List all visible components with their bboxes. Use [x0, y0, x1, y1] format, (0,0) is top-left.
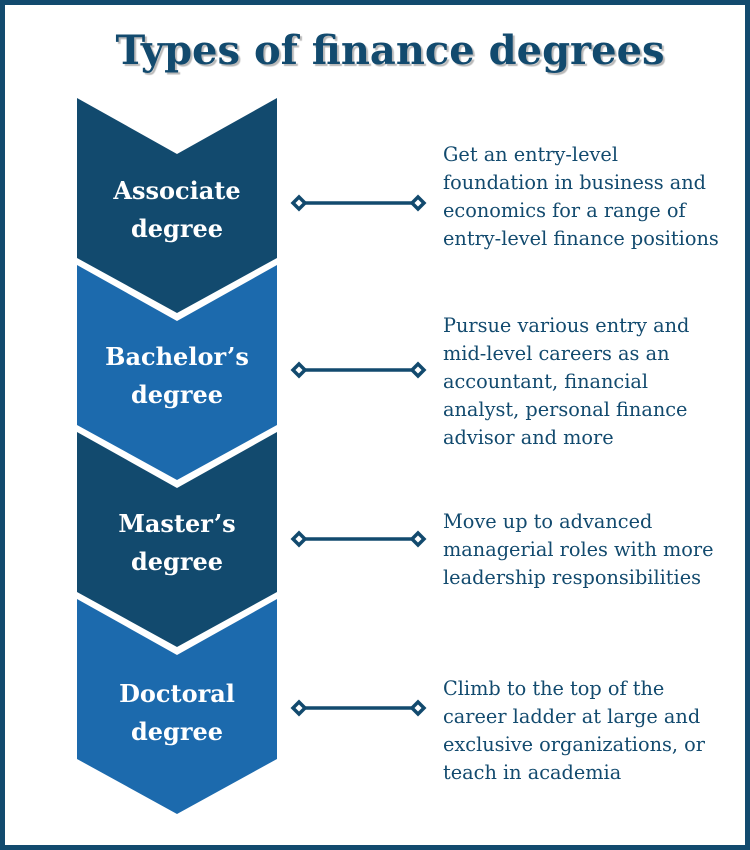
label: master: Master’s [118, 509, 236, 538]
description: master: managerial roles with more [443, 538, 714, 561]
description: master: leadership responsibilities [443, 566, 701, 589]
description: doctoral: exclusive organizations, or [443, 733, 705, 756]
label: bachelor: Bachelor’s [105, 342, 249, 371]
label: master: degree [131, 547, 223, 576]
connector 2 [293, 364, 424, 376]
description: associate: Get an entry-level [443, 143, 618, 166]
description: associate: economics for a range of [443, 199, 686, 222]
chevron: bachelor [77, 265, 277, 480]
description: bachelor [443, 314, 689, 449]
description: master [443, 510, 714, 589]
description: associate [443, 143, 719, 250]
chevron: doctoral [77, 599, 277, 814]
connector 4 [293, 702, 424, 714]
description: bachelor: Pursue various entry and [443, 314, 689, 337]
description: bachelor: advisor and more [443, 426, 614, 449]
label: associate: Associate [113, 176, 241, 205]
label: master [118, 509, 236, 576]
label: associate: degree [131, 214, 223, 243]
description: master: Move up to advanced [443, 510, 652, 533]
description: bachelor: accountant, financial [443, 370, 648, 393]
description: doctoral: Climb to the top of the [443, 677, 664, 700]
connector 1 [293, 197, 424, 209]
description: bachelor: mid-level careers as an [443, 342, 670, 365]
chevron: master [77, 432, 277, 647]
title: Types of finance degrees [115, 27, 665, 74]
connector 3 [293, 533, 424, 545]
label: doctoral [119, 679, 235, 746]
chevron: associate [77, 98, 277, 313]
description: associate: foundation in business and [443, 171, 706, 194]
description: doctoral: teach in academia [443, 761, 621, 784]
label: bachelor: degree [131, 380, 223, 409]
label: associate [113, 176, 241, 243]
description: bachelor: analyst, personal finance [443, 398, 687, 421]
description: doctoral [443, 677, 705, 784]
label: doctoral: Doctoral [119, 679, 235, 708]
description: doctoral: career ladder at large and [443, 705, 700, 728]
label: doctoral: degree [131, 717, 223, 746]
label: bachelor [105, 342, 249, 409]
description: associate: entry-level finance positions [443, 227, 719, 250]
